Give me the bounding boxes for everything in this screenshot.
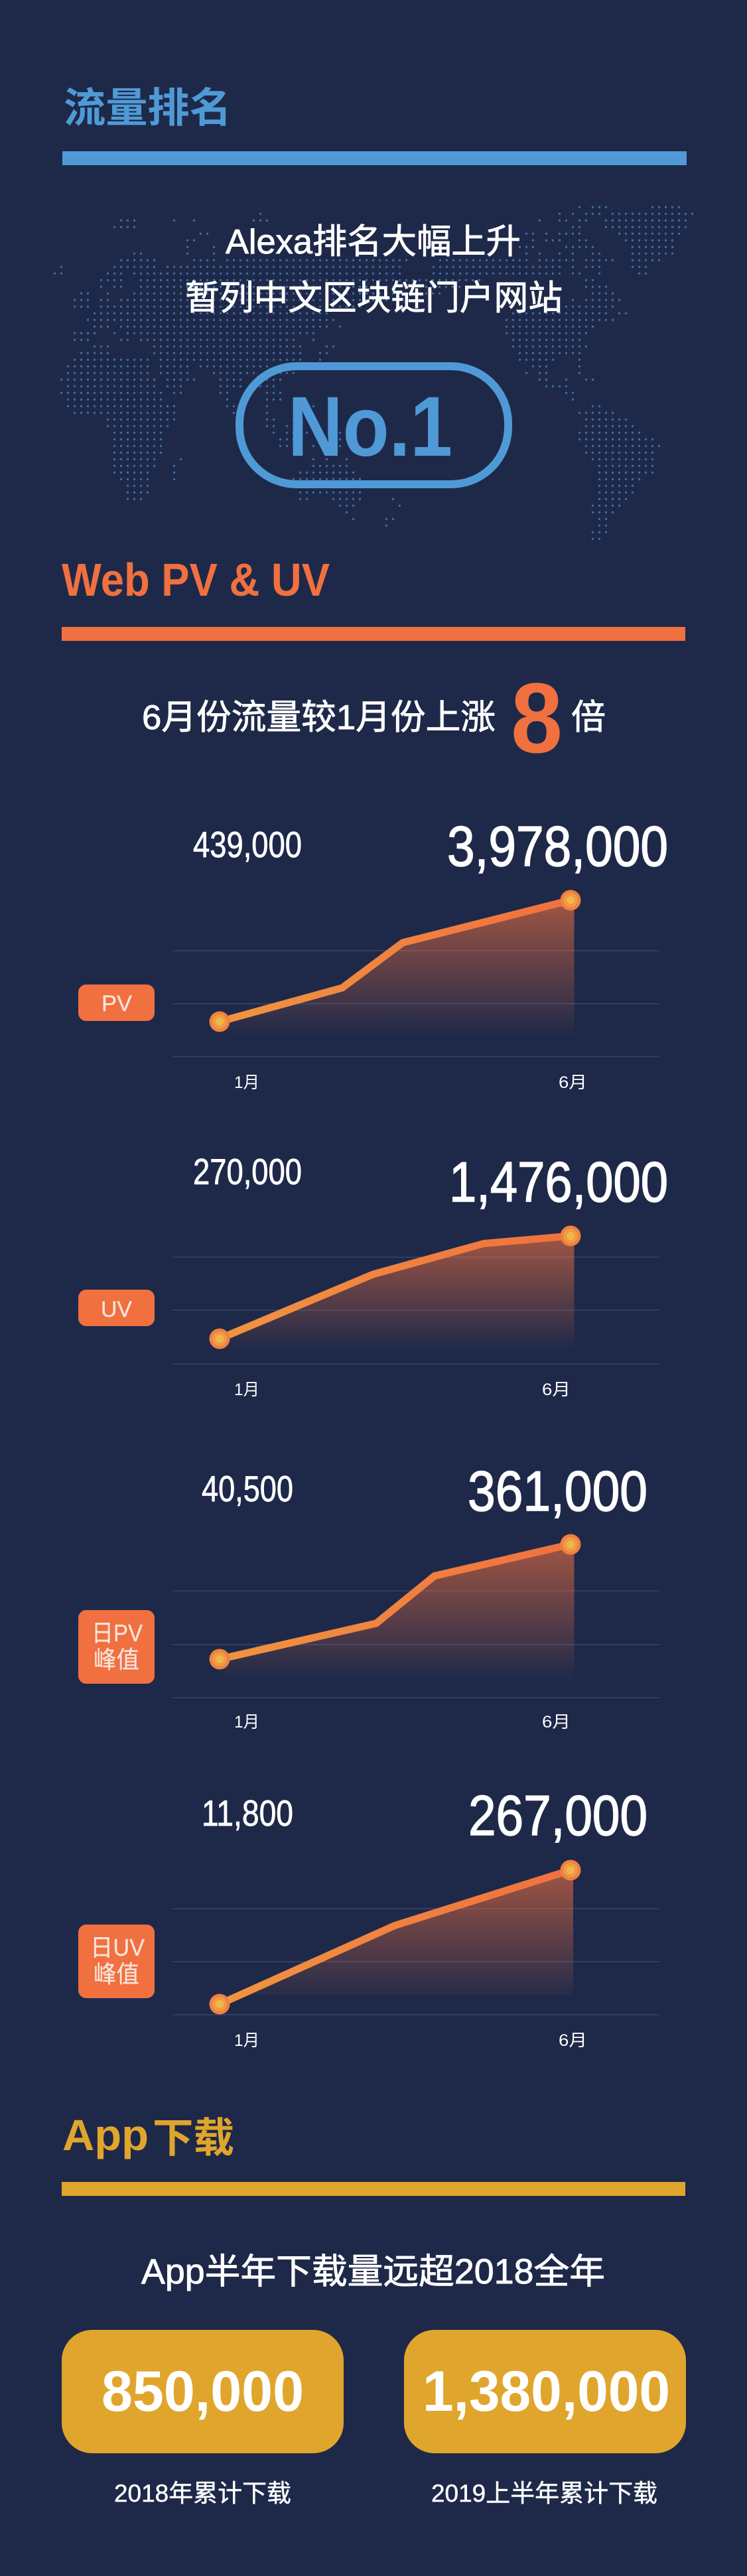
text: Alexa rank claim bbox=[185, 223, 563, 318]
area and line: daily UV peak bbox=[220, 1870, 573, 2004]
point: June PV bbox=[560, 890, 581, 910]
label: PV: PV bbox=[102, 991, 132, 1016]
card: 2019 H1 downloads bbox=[404, 2330, 686, 2453]
value: January UV: 270,000 bbox=[193, 1151, 302, 1192]
value: January daily UV peak: 11,800 bbox=[202, 1793, 293, 1834]
point: June UV bbox=[560, 1226, 581, 1246]
text: Alexa rank claim: 暂列中文区块链门户网站 bbox=[185, 279, 563, 318]
headline: app downloads comparison: App半年下载量远超2018全年 bbox=[141, 2252, 605, 2291]
label: UV bbox=[78, 1290, 155, 1326]
label: daily PV peak bbox=[78, 1610, 155, 1684]
axis label: January: 1月 bbox=[234, 1713, 259, 1731]
point: June daily PV peak bbox=[560, 1534, 581, 1555]
panel: traffic ranking bbox=[54, 86, 693, 539]
headline: traffic up 8 times: 倍 bbox=[571, 699, 606, 737]
blue heading bar bbox=[62, 151, 687, 165]
label: UV: UV bbox=[101, 1297, 132, 1322]
value: January PV: 439,000 bbox=[193, 824, 302, 865]
axis label: June: 6月 bbox=[559, 1073, 587, 1092]
No.1 badge bbox=[239, 366, 508, 484]
label: daily PV peak: 峰值 bbox=[94, 1646, 139, 1673]
text: Alexa rank claim: Alexa排名大幅上升 bbox=[226, 223, 521, 261]
label: daily UV peak bbox=[78, 1925, 155, 1998]
axis label: January: 1月 bbox=[234, 1381, 259, 1399]
point: January daily PV peak bbox=[210, 1649, 230, 1669]
axis label: June: 6月 bbox=[542, 1713, 571, 1731]
chart: daily UV peak bbox=[78, 1785, 659, 2050]
chart: PV bbox=[78, 815, 668, 1092]
label: daily UV peak: 日UV bbox=[90, 1934, 145, 1961]
area and line: UV bbox=[220, 1236, 575, 1351]
heading: App downloads: 下载 bbox=[153, 2116, 234, 2161]
area and line: PV bbox=[220, 900, 575, 1037]
value: June daily UV peak: 267,000 bbox=[468, 1785, 647, 1848]
label: daily UV peak: 峰值 bbox=[94, 1960, 139, 1988]
heading: App downloads bbox=[62, 2110, 234, 2161]
axis label: June: 6月 bbox=[542, 1381, 571, 1399]
value: June UV: 1,476,000 bbox=[449, 1151, 668, 1214]
gold heading bar bbox=[62, 2182, 685, 2196]
panel: App downloads bbox=[62, 2110, 686, 2507]
caption: 2018 downloads: 2018年累计下载 bbox=[114, 2480, 291, 2507]
value: January daily PV peak: 40,500 bbox=[202, 1468, 293, 1509]
caption: 2019 H1 downloads: 2019上半年累计下载 bbox=[431, 2480, 657, 2507]
orange heading bar bbox=[62, 627, 685, 641]
point: June daily UV peak bbox=[560, 1860, 581, 1880]
axis label: January: 1月 bbox=[234, 2031, 259, 2050]
panel: Web PV and UV bbox=[62, 554, 685, 2050]
point: January PV bbox=[210, 1011, 230, 1032]
axis label: June: 6月 bbox=[559, 2031, 587, 2050]
headline: traffic up 8 times bbox=[142, 662, 606, 774]
card: 2018 downloads: 850,000 bbox=[102, 2360, 304, 2423]
value: June daily PV peak: 361,000 bbox=[468, 1460, 647, 1523]
chart: daily PV peak bbox=[78, 1460, 659, 1731]
label: daily PV peak: 日PV bbox=[92, 1619, 143, 1647]
card: 2018 downloads bbox=[62, 2330, 344, 2453]
headline: traffic up 8 times: 6月份流量较1月份上涨 bbox=[142, 699, 496, 737]
value: June PV: 3,978,000 bbox=[447, 815, 668, 878]
heading: traffic ranking: 流量排名 bbox=[64, 86, 232, 131]
dotted world map bbox=[54, 207, 693, 539]
axis label: January: 1月 bbox=[234, 1073, 259, 1092]
point: January UV bbox=[210, 1328, 230, 1349]
point: January daily UV peak bbox=[210, 1994, 230, 2014]
card: 2019 H1 downloads: 1,380,000 bbox=[423, 2360, 670, 2423]
No.1 badge: No.1 bbox=[288, 379, 452, 474]
heading: Web PV and UV: Web PV & UV bbox=[62, 554, 330, 606]
area and line: daily PV peak bbox=[220, 1544, 575, 1680]
heading: App downloads: App bbox=[62, 2110, 149, 2159]
chart: UV bbox=[78, 1151, 668, 1399]
label: PV bbox=[78, 984, 155, 1021]
headline: traffic up 8 times: 8 bbox=[511, 662, 563, 774]
